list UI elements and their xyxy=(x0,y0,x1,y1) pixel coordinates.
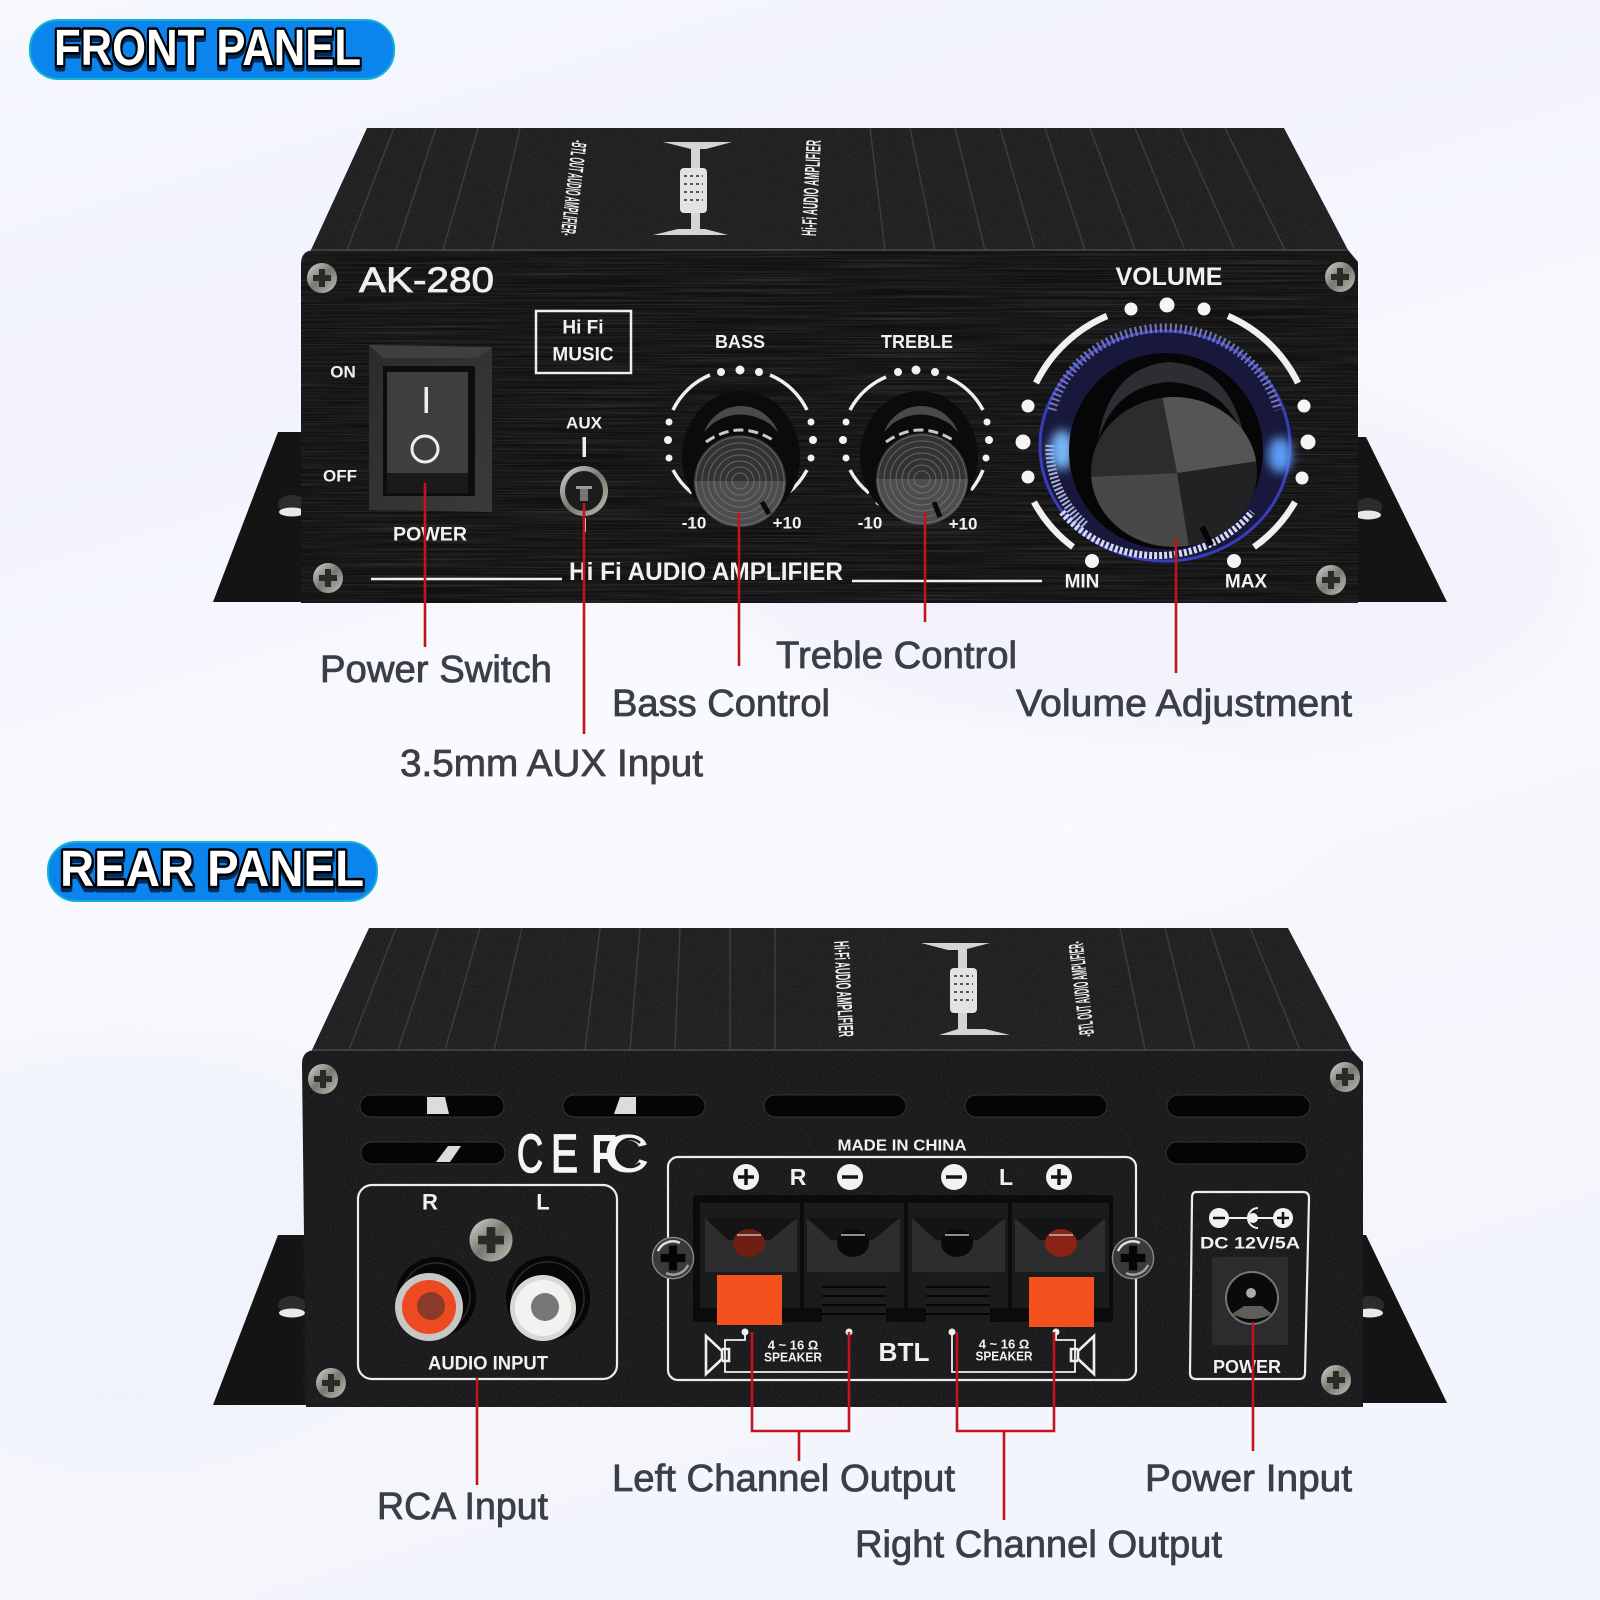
dc power panel: POWER xyxy=(1213,1357,1281,1377)
speaker ratings: SPEAKER xyxy=(764,1350,823,1364)
audio input panel: R xyxy=(422,1190,438,1214)
label: aux input: 3.5mm AUX Input xyxy=(400,743,703,785)
front face xyxy=(301,250,1358,603)
top diagram xyxy=(921,943,1010,1035)
top diagram xyxy=(653,142,732,235)
model name: AK-280 xyxy=(359,261,494,300)
bass knob: BASS xyxy=(715,332,765,352)
label: power switch: Power Switch xyxy=(320,649,552,691)
certification marks xyxy=(517,1123,649,1185)
dc power panel: DC 12V/5A xyxy=(1200,1234,1300,1252)
heading: rear panel: REAR PANEL xyxy=(60,844,364,901)
speaker ratings: 4 ~ 16 Ω xyxy=(768,1338,818,1352)
AUX jack xyxy=(560,414,608,532)
amplifier: rear view: Hi-Fi AUDIO AMPLIFIER xyxy=(829,940,857,1038)
vent slots xyxy=(360,1095,1310,1164)
top heatsink face xyxy=(311,128,1348,250)
polarity symbols: R xyxy=(790,1164,807,1190)
speaker ratings xyxy=(764,1336,1033,1367)
bass knob xyxy=(664,332,817,532)
polarity symbols xyxy=(733,1164,1072,1190)
treble knob: -10 xyxy=(858,514,882,532)
speaker ratings: BTL xyxy=(878,1337,930,1367)
speaker ratings: SPEAKER xyxy=(976,1348,1033,1364)
red rca jack xyxy=(395,1257,476,1341)
text: -BTL OUT AUDIO AMPLIFIER- xyxy=(1065,940,1099,1038)
heading: front panel: FRONT PANEL xyxy=(54,23,361,80)
right mounting bracket xyxy=(1356,1235,1447,1403)
label: treble control: Treble Control xyxy=(776,635,1017,677)
model strip: Hi Fi AUDIO AMPLIFIER xyxy=(569,558,843,586)
speaker ratings: 4 ~ 16 Ω xyxy=(979,1336,1029,1352)
right mounting bracket xyxy=(1354,437,1447,602)
amplifier: front view xyxy=(213,128,1447,603)
OFF label: OFF xyxy=(323,466,357,486)
label: rca input: RCA Input xyxy=(377,1486,548,1528)
side screws xyxy=(652,1237,1154,1279)
treble knob: TREBLE xyxy=(881,332,953,352)
amplifier: rear view xyxy=(213,928,1447,1407)
volume knob: MIN xyxy=(1065,572,1099,592)
left mounting bracket xyxy=(213,1235,307,1405)
certification marks: C xyxy=(604,1124,649,1184)
screws xyxy=(308,1062,1360,1398)
screw xyxy=(469,1218,513,1262)
audio input panel xyxy=(358,1185,617,1379)
speaker terminal panel xyxy=(652,1138,1154,1380)
Hi Fi Music badge: Hi Fi xyxy=(562,318,604,338)
treble knob: +10 xyxy=(949,514,977,534)
speaker wiring and icons xyxy=(706,1328,1094,1374)
label: power input: Power Input xyxy=(1145,1458,1352,1500)
text: Hi-Fi AUDIO AMPLIFIER xyxy=(798,139,826,237)
screws xyxy=(307,262,1355,595)
dc jack xyxy=(1212,1257,1288,1345)
vent glints xyxy=(427,1097,636,1162)
label: volume adjustment: Volume Adjustment xyxy=(1016,683,1352,725)
bass knob: -10 xyxy=(682,514,706,532)
AUX jack: AUX xyxy=(566,414,603,432)
polarity symbols: L xyxy=(999,1164,1013,1190)
callout lines: rear panel xyxy=(477,1322,1253,1520)
left mounting bracket xyxy=(213,432,306,602)
heading: front panel: FRONT PANEL xyxy=(54,19,361,76)
POWER label: POWER xyxy=(393,524,467,546)
dc polarity symbol xyxy=(1209,1208,1293,1228)
heading: rear panel: REAR PANEL xyxy=(60,840,364,897)
volume knob: VOLUME xyxy=(1116,263,1222,291)
white rca jack xyxy=(506,1256,590,1341)
ON label: ON xyxy=(330,362,356,382)
audio input panel: L xyxy=(536,1190,550,1214)
certification marks: E xyxy=(551,1124,578,1184)
audio input panel: AUDIO INPUT xyxy=(428,1354,548,1374)
top heatsink face xyxy=(312,928,1352,1050)
volume knob xyxy=(1016,263,1316,592)
label: bass control: Bass Control xyxy=(612,683,830,725)
label: right channel output: Right Channel Output xyxy=(855,1524,1222,1566)
rear face xyxy=(302,1050,1363,1407)
bass knob: +10 xyxy=(773,514,801,532)
amplifier: front view: -BTL OUT AUDIO AMPLIFIER- xyxy=(556,139,590,237)
treble knob xyxy=(839,332,993,534)
label: left channel output: Left Channel Output xyxy=(612,1458,955,1500)
Hi Fi Music badge xyxy=(536,311,631,373)
volume knob: MAX xyxy=(1225,572,1267,592)
speaker terminal panel: MADE IN CHINA xyxy=(838,1138,967,1154)
callout lines: front panel xyxy=(425,483,1176,734)
terminal block xyxy=(693,1195,1113,1327)
certification marks: F xyxy=(591,1123,617,1185)
certification marks: C xyxy=(517,1124,543,1184)
dc power panel xyxy=(1190,1192,1309,1379)
Hi Fi Music badge: MUSIC xyxy=(552,344,614,366)
power rocker switch xyxy=(369,345,492,512)
